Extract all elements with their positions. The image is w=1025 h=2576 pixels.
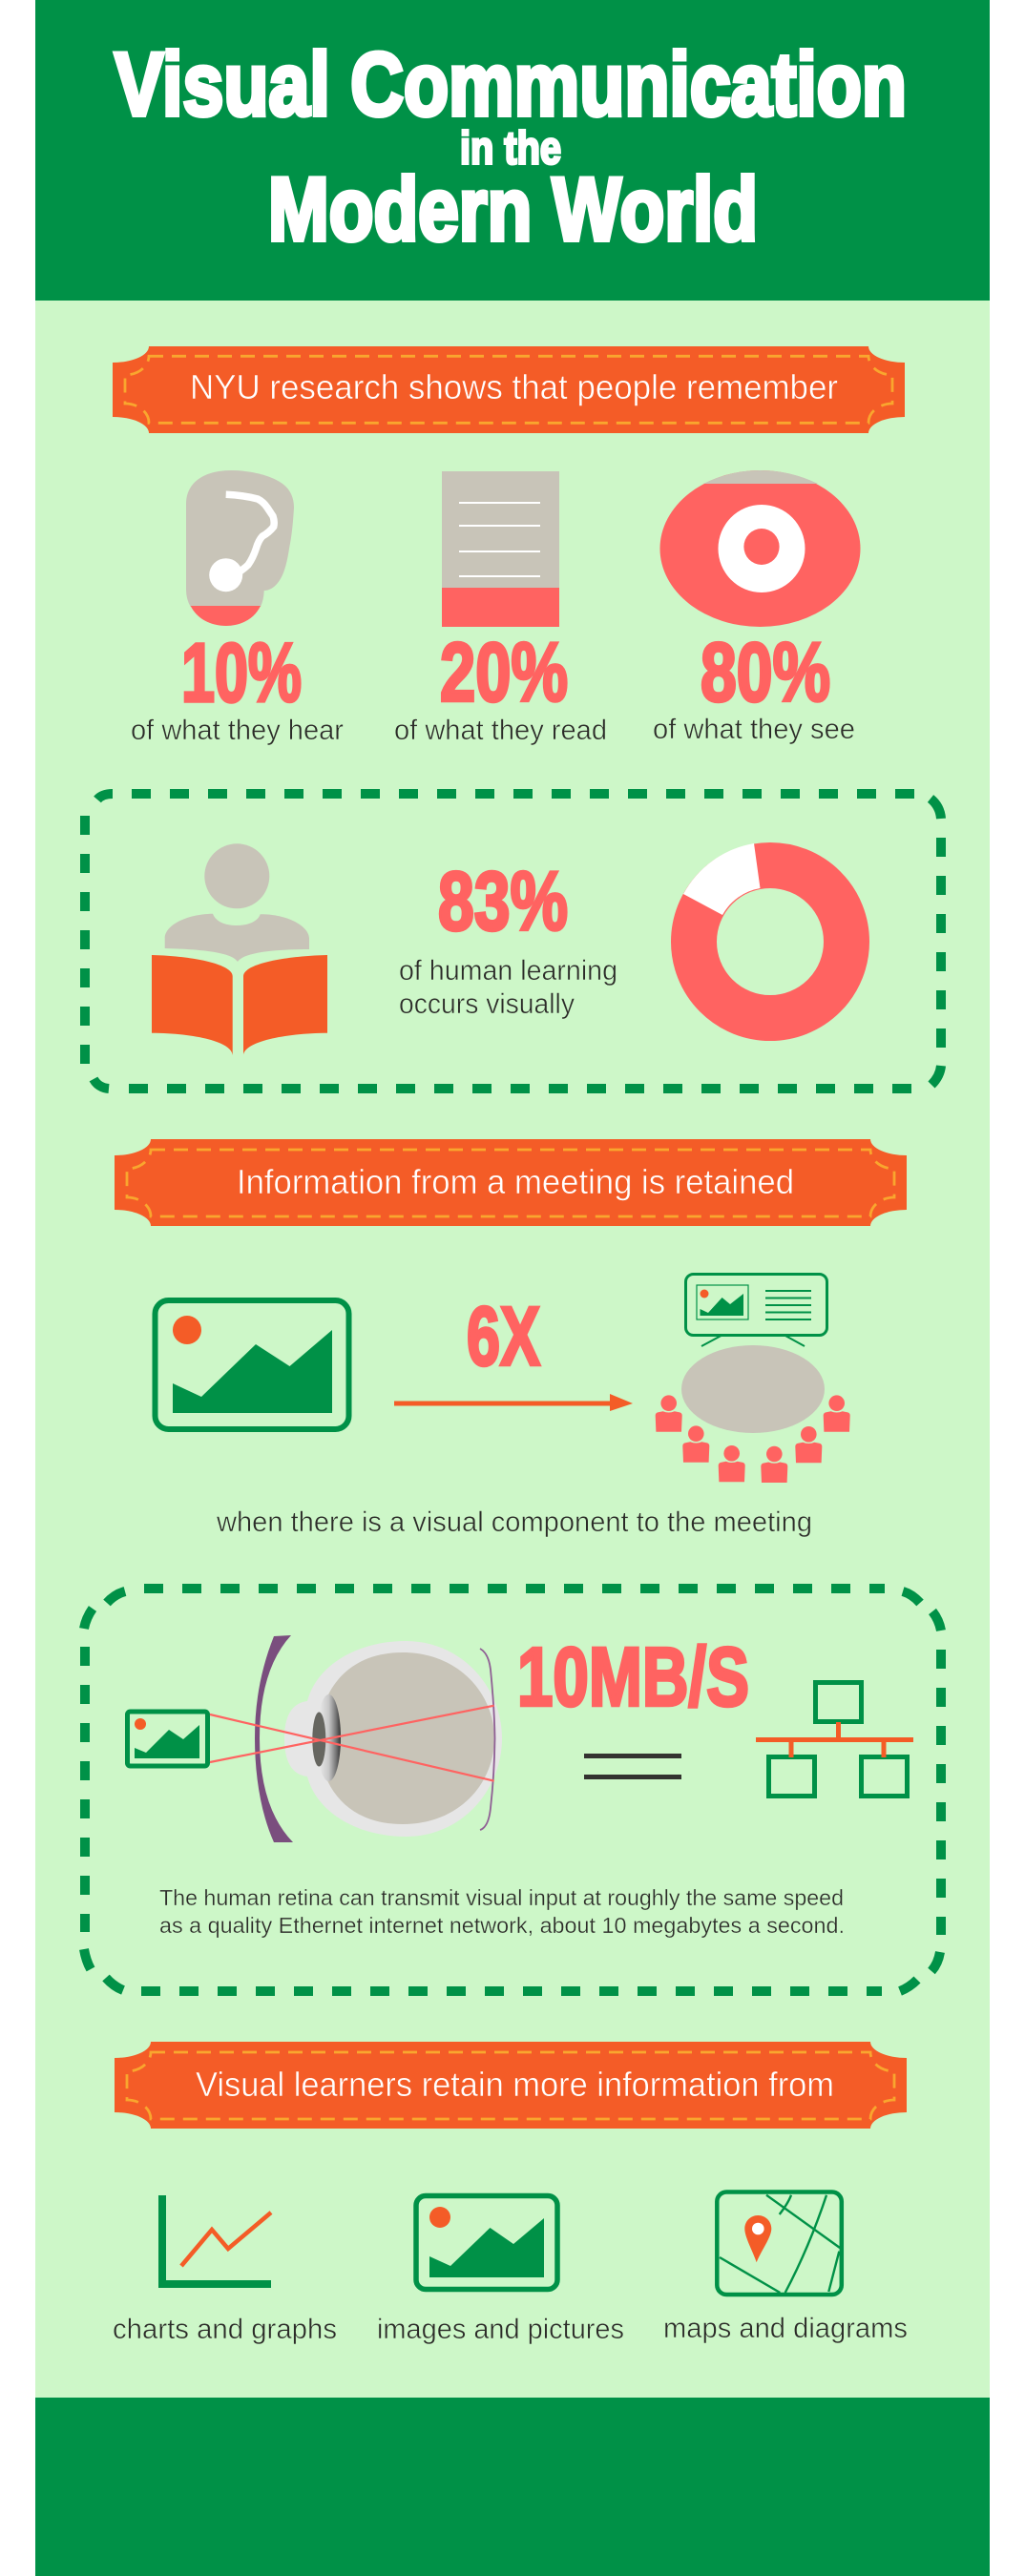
banner: NYU research <box>113 346 905 433</box>
text: retina paragraph: The human retina can transmit visual input at roughly the same speed <box>159 1885 844 1910</box>
banner: NYU research: NYU research shows that people remember <box>190 367 838 406</box>
label: read: of what they read <box>394 715 607 746</box>
title: in the <box>460 124 561 174</box>
icon: document 20% <box>442 471 559 627</box>
icon: picture <box>155 1300 349 1429</box>
icon: meeting room <box>656 1275 850 1483</box>
icon: equals <box>584 1754 681 1779</box>
text: human learning: of human learning <box>399 955 617 987</box>
text: retina paragraph: as a quality Ethernet internet network, about 10 megabytes a second. <box>159 1913 845 1938</box>
text: human learning: occurs visually <box>399 988 575 1020</box>
banner: visual learners <box>115 2042 907 2129</box>
panel: light green background <box>35 301 990 2398</box>
title <box>115 34 907 260</box>
label: see: of what they see <box>653 714 855 745</box>
text: human learning <box>399 955 617 1020</box>
stat: 83%: 83% <box>438 855 568 948</box>
icon: person reading <box>152 843 327 1055</box>
label: charts: charts and graphs <box>113 2314 337 2345</box>
panel: header band <box>35 0 990 301</box>
stat: 10%: 10% <box>181 627 302 719</box>
icon: network <box>756 1683 913 1796</box>
title: Modern World <box>268 158 758 260</box>
icon: picture small <box>416 2196 557 2290</box>
icon: line chart <box>162 2195 271 2284</box>
label: maps: maps and diagrams <box>663 2313 908 2344</box>
stat: 10MB/S: 10MB/S <box>517 1631 749 1723</box>
banner: meeting <box>115 1139 907 1226</box>
icon: eye diagram <box>255 1635 502 1842</box>
banner: meeting: Information from a meeting is retained <box>237 1162 794 1201</box>
text: visual component: when there is a visual component to the meeting <box>216 1506 812 1538</box>
panel: dashed frame retina <box>84 1589 941 1991</box>
label: hear: of what they hear <box>131 715 344 746</box>
panel: footer band <box>35 2398 990 2576</box>
icon: map <box>717 2192 842 2295</box>
label: images: images and pictures <box>377 2314 624 2345</box>
stat: 80%: 80% <box>701 626 830 719</box>
icon: small picture <box>128 1712 208 1766</box>
panel: dashed frame learning <box>85 794 941 1089</box>
text: retina paragraph <box>159 1885 845 1938</box>
icon: eye 80% <box>660 470 861 627</box>
chart: donut 83% <box>683 843 847 1018</box>
rays <box>210 1706 494 1781</box>
stat: 6X: 6X <box>467 1290 540 1383</box>
arrow <box>394 1394 633 1411</box>
banner: visual learners: Visual learners retain more information from <box>196 2065 834 2104</box>
icon: ear 10% <box>186 470 294 626</box>
stat: 20%: 20% <box>440 626 568 719</box>
